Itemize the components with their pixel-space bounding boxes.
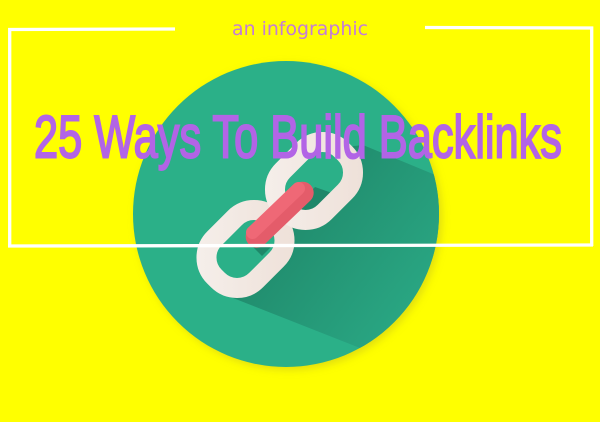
connector shadow in lower hole [253, 246, 272, 256]
white frame [8, 28, 593, 247]
icon: upper chain link [264, 131, 364, 231]
long cast shadow [232, 146, 439, 348]
icon: lower chain link [195, 199, 296, 299]
lower link hole [195, 199, 296, 299]
frame top-right and right side [425, 28, 592, 246]
circle shadow [136, 64, 442, 370]
green circle [133, 61, 439, 367]
icon: red connector bar [252, 188, 303, 237]
icon: green circle with chain link [133, 61, 450, 370]
subtitle: an infographic [232, 18, 368, 40]
frame left and top-left segment [10, 29, 175, 247]
upper link hole [264, 131, 364, 231]
frame bottom line [8, 245, 593, 246]
connector shadow in upper hole [293, 187, 332, 214]
